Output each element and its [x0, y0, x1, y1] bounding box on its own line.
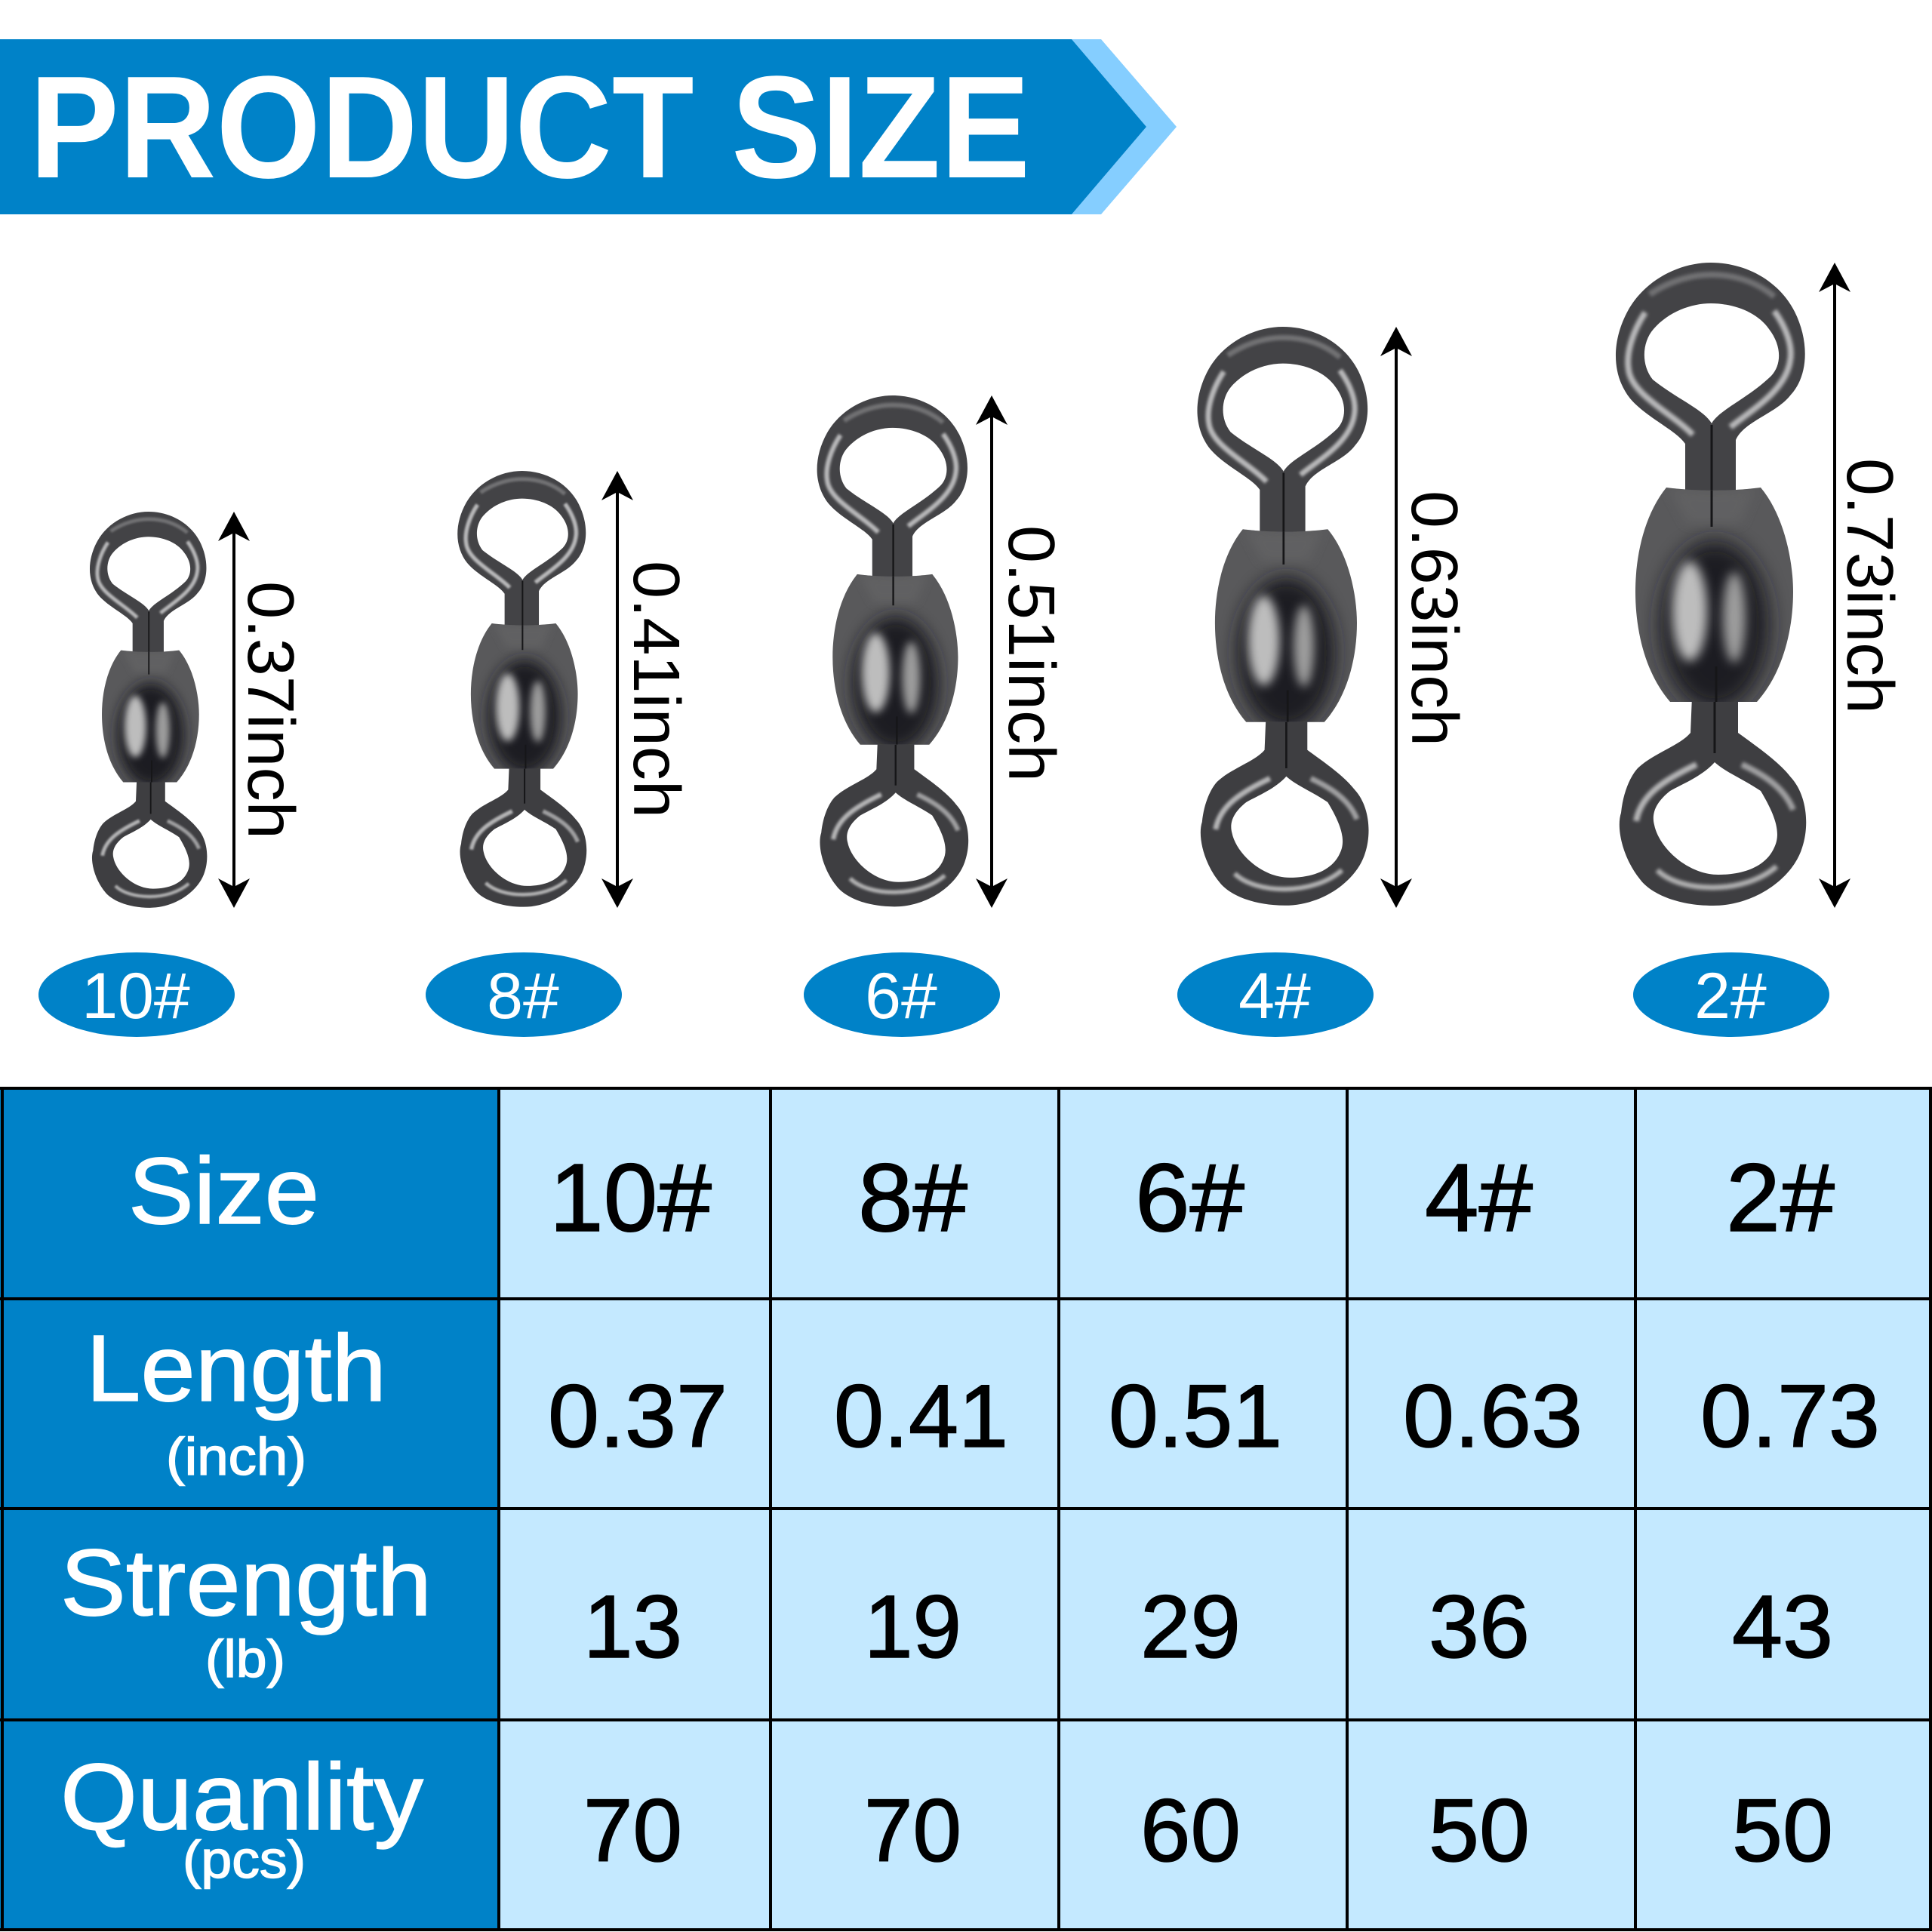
badge 4#: 4#	[1238, 960, 1311, 1032]
panel: swivel sizes	[38, 263, 1906, 1037]
dimension label 0.37inch: 0.37inch	[234, 581, 307, 839]
table header column background	[0, 1088, 499, 1930]
size row values: 2#	[1726, 1144, 1835, 1252]
strength row values: 13	[583, 1577, 682, 1677]
size row values: 4#	[1425, 1144, 1533, 1252]
arrow 0.37	[218, 512, 250, 908]
swivel 8#	[457, 471, 586, 907]
size row values: 8#	[858, 1144, 968, 1252]
strength row values: 29	[1140, 1577, 1241, 1677]
row label: strength: (lb)	[205, 1629, 285, 1688]
badge 10#	[38, 952, 235, 1037]
quantity row values: 50	[1429, 1781, 1530, 1881]
banner: product size	[0, 39, 1177, 214]
length row values: 0.63	[1403, 1367, 1583, 1466]
arrow 0.73	[1819, 263, 1850, 908]
badge 10#: 10#	[82, 960, 190, 1032]
length row values	[548, 1367, 1880, 1466]
swivel 2#	[1616, 263, 1806, 906]
title: PRODUCT SIZE	[29, 45, 1030, 208]
arrow 0.41	[601, 471, 633, 908]
dimension label 0.51inch: 0.51inch	[995, 525, 1068, 782]
length row values: 0.37	[548, 1367, 728, 1466]
swivel 10#	[90, 512, 207, 908]
badge 2#: 2#	[1694, 960, 1767, 1032]
row label: quanlity	[60, 1745, 424, 1889]
swivel 6#	[817, 395, 968, 906]
length row values: 0.51	[1109, 1367, 1282, 1466]
size row values: 6#	[1135, 1144, 1244, 1252]
badge 6#	[804, 952, 1000, 1037]
dimension label 0.63inch: 0.63inch	[1398, 491, 1471, 746]
strength row values: 43	[1732, 1577, 1833, 1677]
table values background	[499, 1088, 1932, 1930]
badge 8#: 8#	[487, 960, 559, 1032]
row label: length	[86, 1316, 386, 1486]
dimension label 0.41inch: 0.41inch	[620, 561, 693, 818]
badge 8#	[426, 952, 622, 1037]
dimension label 0.73inch: 0.73inch	[1833, 458, 1906, 714]
arrow 0.51	[976, 395, 1008, 908]
banner blue arrow	[0, 39, 1146, 214]
size row values	[549, 1144, 1835, 1252]
badge 2#	[1633, 952, 1829, 1037]
panel: specification table	[0, 1088, 1932, 1930]
quantity row values: 60	[1140, 1781, 1241, 1881]
quantity row values: 70	[864, 1781, 961, 1881]
arrow 0.63	[1380, 327, 1412, 908]
quantity row values: 50	[1732, 1781, 1833, 1881]
quantity row values	[583, 1781, 1833, 1881]
length row values: 0.73	[1700, 1367, 1880, 1466]
row label: strength: Strength	[60, 1531, 432, 1635]
badge 6#: 6#	[865, 960, 937, 1032]
quantity row values: 70	[583, 1781, 682, 1881]
row label: length: Length	[86, 1316, 386, 1421]
strength row values	[583, 1577, 1833, 1677]
strength row values: 19	[864, 1577, 961, 1677]
row label: quanlity: (pcs)	[183, 1830, 306, 1889]
swivel 4#	[1197, 327, 1369, 906]
size row values: 10#	[549, 1144, 712, 1252]
row label: strength	[60, 1531, 432, 1688]
banner light chevron	[1072, 39, 1177, 214]
strength row values: 36	[1429, 1577, 1530, 1677]
row label: quanlity: Quanlity	[60, 1745, 424, 1850]
length row values: 0.41	[834, 1367, 1008, 1466]
badge 4#	[1177, 952, 1374, 1037]
row label: size: Size	[128, 1139, 319, 1244]
row label: length: (inch)	[166, 1427, 306, 1486]
